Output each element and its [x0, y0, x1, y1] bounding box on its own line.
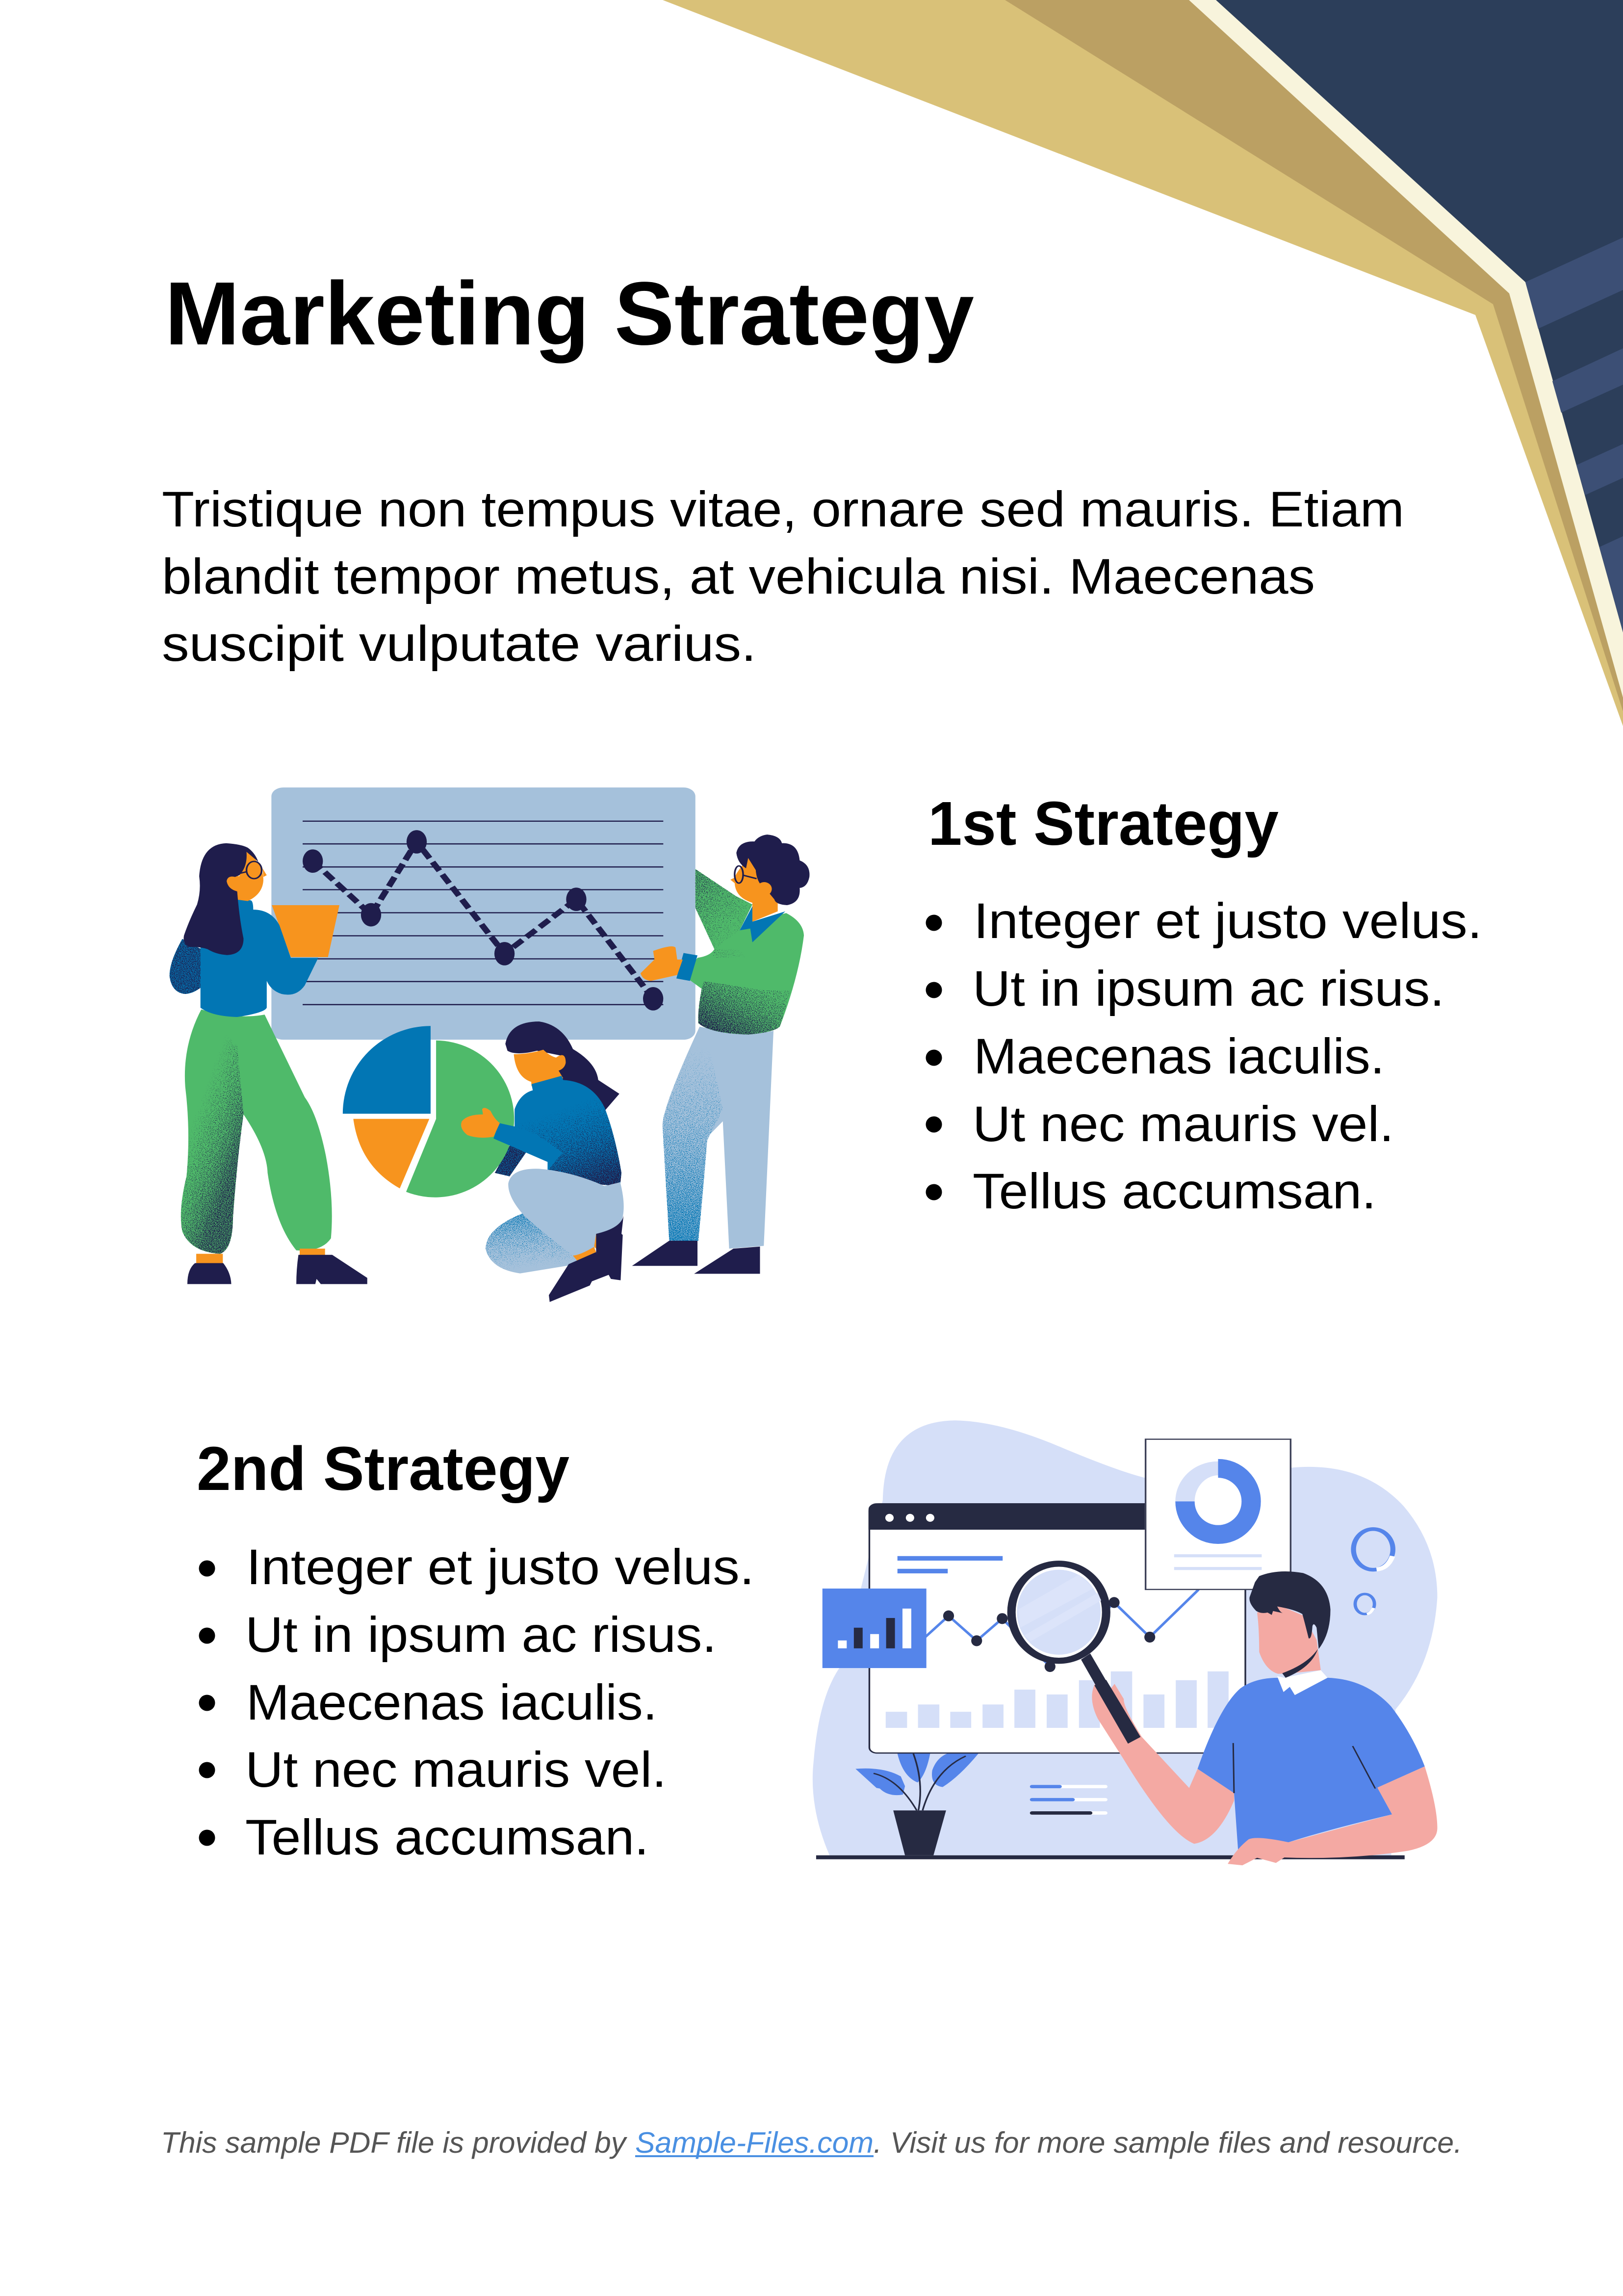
plant	[855, 1754, 979, 1855]
heading: 1st strategy: 1st Strategy	[928, 789, 1279, 858]
person: woman with tablet	[170, 843, 367, 1284]
list: 2nd strategy	[199, 1539, 754, 1865]
magnifying glass	[1011, 1564, 1140, 1744]
list: 2nd strategy: Ut nec mauris vel.	[245, 1742, 667, 1798]
background blob	[813, 1420, 1437, 1855]
list: 2nd strategy: Integer et justo velus.	[246, 1539, 754, 1595]
list: 2nd strategy: Maecenas iaculis.	[246, 1674, 657, 1730]
corner decoration	[663, 0, 1623, 726]
chart board	[271, 787, 696, 1040]
decorative rings	[1354, 1529, 1393, 1614]
footer note: . Visit us for more sample files and resource.	[874, 2126, 1462, 2159]
person: analyst	[1092, 1571, 1437, 1865]
list: 2nd strategy: Ut in ipsum ac risus.	[245, 1607, 717, 1663]
illustration: team with chart board	[170, 787, 809, 1302]
footer note: Sample-Files.com	[635, 2126, 874, 2159]
list: 1st strategy: Ut in ipsum ac risus.	[973, 961, 1444, 1017]
intro paragraph: blandit tempor metus, at vehicula nisi. Maecenas	[162, 548, 1315, 604]
heading: 2nd strategy: 2nd Strategy	[197, 1434, 569, 1503]
footer note	[161, 2126, 1462, 2159]
list: 2nd strategy: Tellus accumsan.	[245, 1809, 649, 1865]
pie chart	[343, 1026, 529, 1198]
illustration: analyst with magnifier	[812, 1420, 1437, 1865]
intro paragraph: suscipit vulputate varius.	[162, 616, 756, 672]
footer note: This sample PDF file is provided by	[161, 2126, 628, 2159]
list: 1st strategy: Tellus accumsan.	[973, 1163, 1376, 1219]
small bar chart card	[823, 1589, 927, 1668]
list: 1st strategy: Ut nec mauris vel.	[973, 1096, 1394, 1152]
title: Marketing Strategy	[165, 263, 974, 364]
intro paragraph: Tristique non tempus vitae, ornare sed mauris. Etiam	[162, 481, 1404, 537]
intro paragraph	[162, 481, 1404, 672]
list: 1st strategy: Maecenas iaculis.	[974, 1028, 1385, 1084]
donut report card	[1146, 1439, 1290, 1590]
list: 1st strategy	[926, 893, 1482, 1219]
progress bars	[1030, 1785, 1108, 1815]
list: 1st strategy: Integer et justo velus.	[974, 893, 1482, 949]
person: man with curly hair	[632, 835, 809, 1274]
person: crouching woman	[461, 1021, 624, 1302]
ground line	[816, 1855, 1405, 1859]
browser window	[869, 1503, 1245, 1753]
